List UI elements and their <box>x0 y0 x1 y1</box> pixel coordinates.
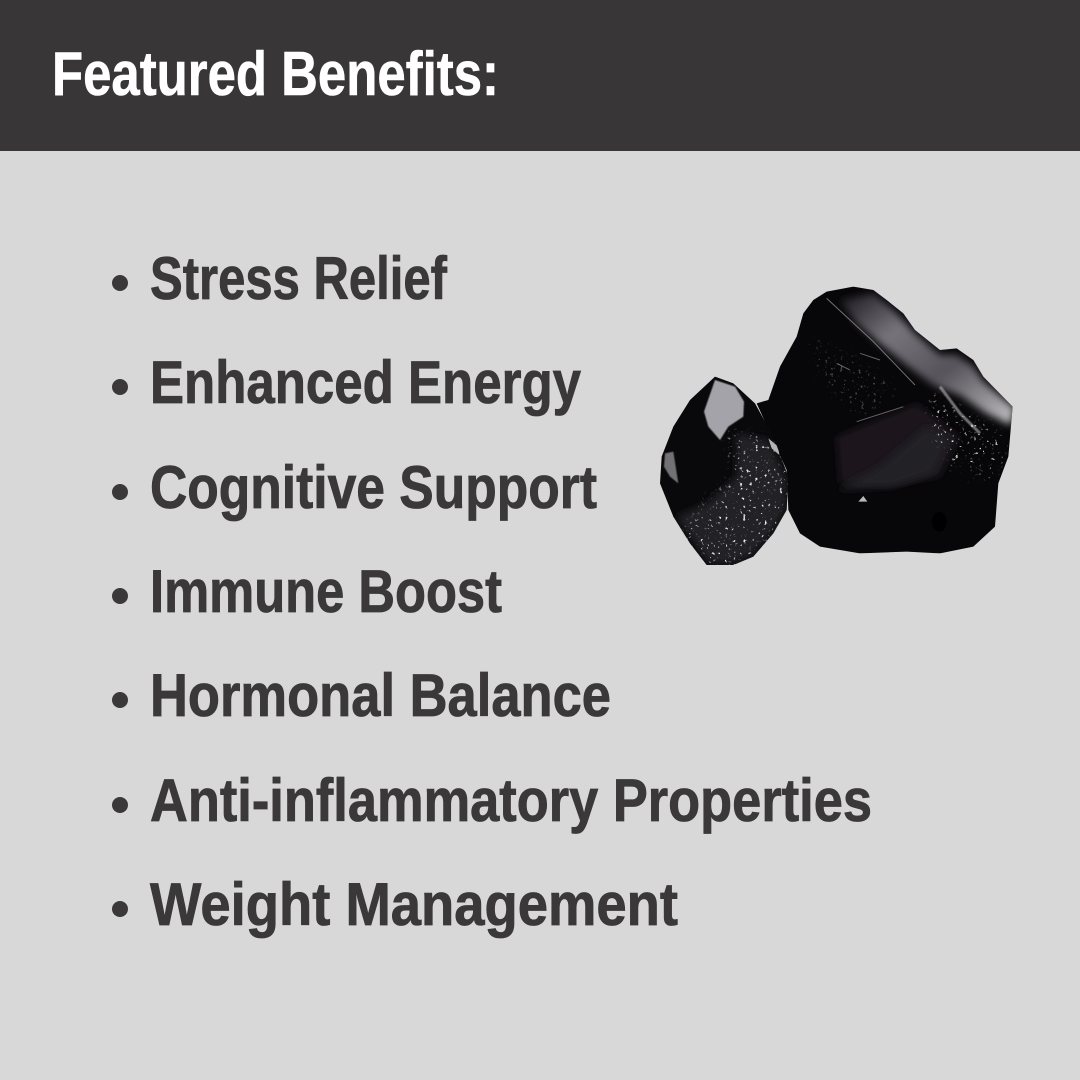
title: Featured Benefits: <box>52 40 499 109</box>
header band <box>0 0 1080 151</box>
benefits list <box>112 245 872 938</box>
list item: Immune Boost: Immune Boost <box>150 558 502 625</box>
list item: Anti-inflammatory Properties: Anti-inflammatory Properties <box>150 767 872 834</box>
small stone <box>660 376 788 565</box>
list item: Enhanced Energy: Enhanced Energy <box>150 349 582 416</box>
illustration: black obsidian stones <box>657 283 1017 570</box>
large stone <box>753 283 1017 557</box>
list item: Cognitive Support: Cognitive Support <box>150 454 597 521</box>
list item: Stress Relief: Stress Relief <box>150 245 448 312</box>
list item: Weight Management: Weight Management <box>150 871 678 938</box>
list item: Hormonal Balance: Hormonal Balance <box>150 662 611 729</box>
